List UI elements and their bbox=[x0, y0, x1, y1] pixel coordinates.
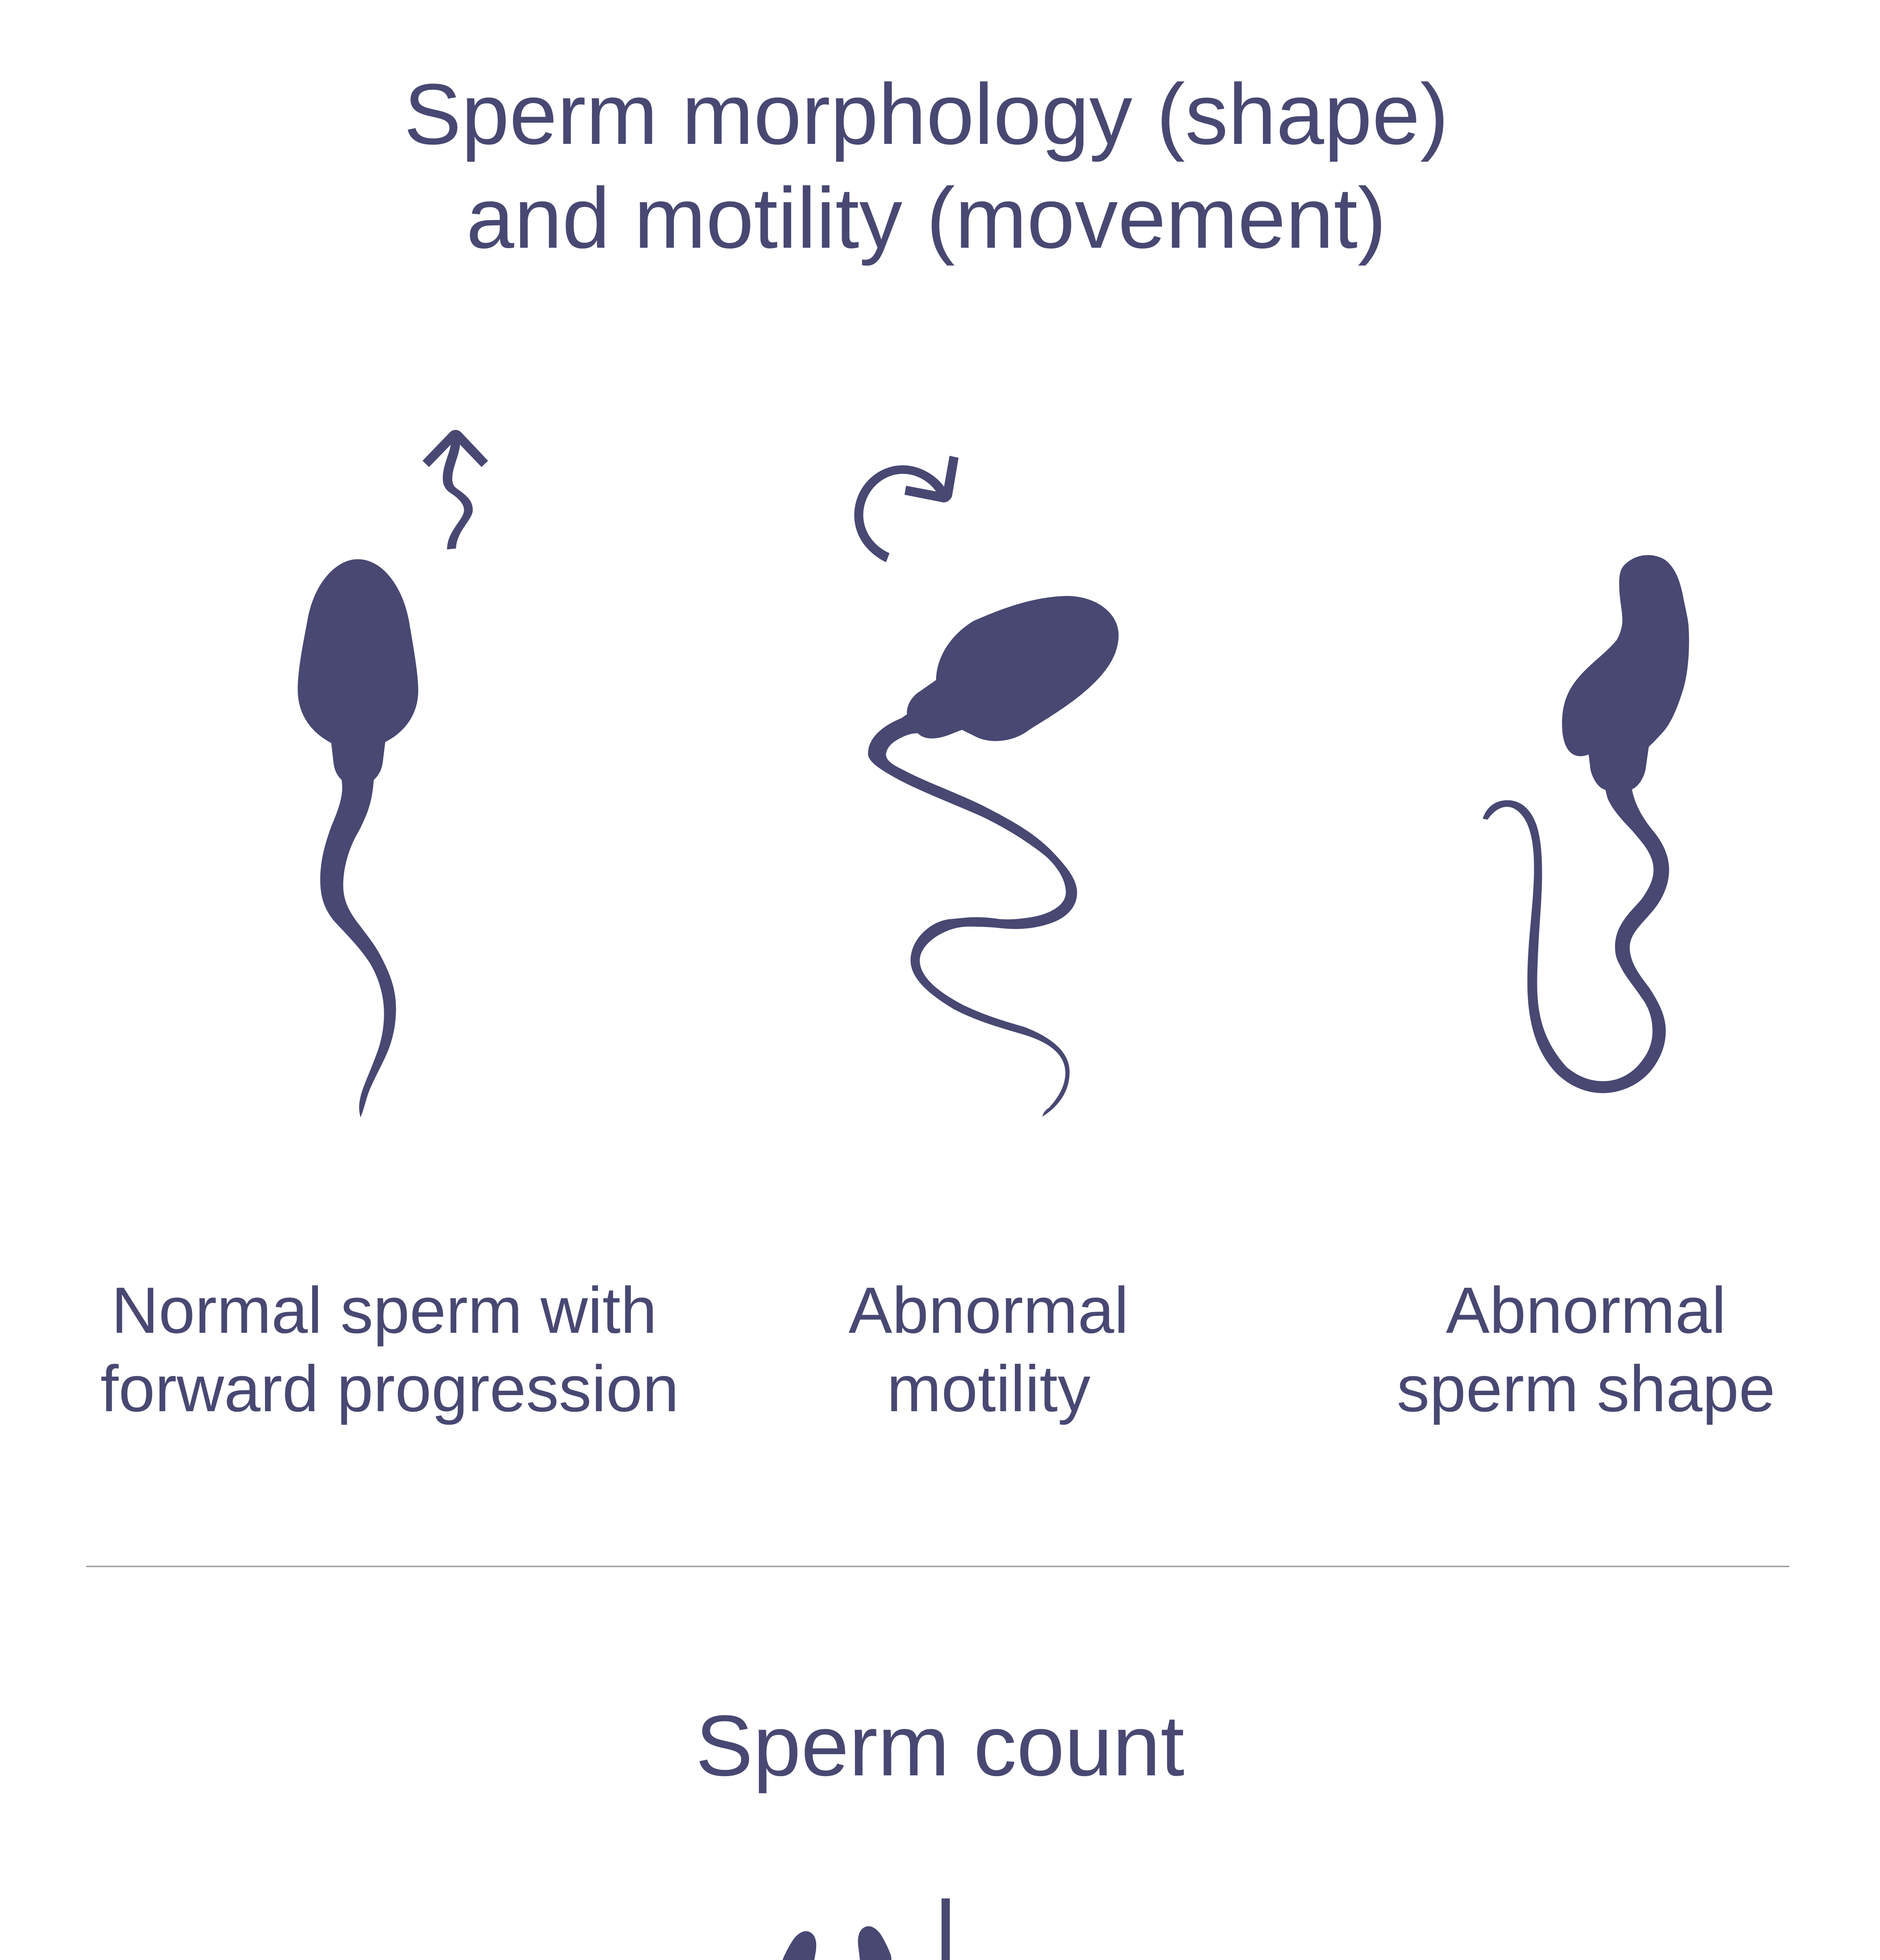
section: sperm morphology and motility bbox=[100, 66, 1775, 1425]
label: normal sperm with forward progression: forward progression bbox=[100, 1352, 679, 1425]
heading: sperm count: Sperm count bbox=[695, 1697, 1185, 1794]
label: abnormal motility: Abnormal bbox=[849, 1274, 1129, 1347]
sperm B bbox=[851, 1922, 922, 1960]
label: abnormal sperm shape: sperm shape bbox=[1397, 1352, 1775, 1425]
label: normal sperm with forward progression: Normal sperm with bbox=[111, 1274, 657, 1347]
label: abnormal sperm shape: Abnormal bbox=[1446, 1274, 1726, 1347]
icon: abnormal motility sperm bbox=[854, 456, 1119, 1117]
icon: abnormal sperm shape bbox=[1483, 555, 1689, 1093]
sperm body: normal bbox=[298, 559, 418, 1117]
title: sperm morphology and motility: Sperm morphology (shape) bbox=[404, 66, 1449, 162]
section: sperm count bbox=[501, 1697, 1375, 1960]
sperm A bbox=[747, 1927, 824, 1960]
label: abnormal motility: motility bbox=[887, 1352, 1091, 1425]
arrow: wavy forward arrow bbox=[423, 430, 488, 550]
cluster: normal sperm count bbox=[501, 1922, 923, 1960]
title: sperm morphology and motility: and motility (movement) bbox=[466, 170, 1386, 266]
icon: normal sperm with forward progression bbox=[298, 430, 488, 1117]
sperm body: abnormal motility bbox=[868, 596, 1119, 1117]
arrow: circular rotation arrow bbox=[854, 456, 958, 562]
divider bar between normal and low count bbox=[942, 1898, 950, 1960]
chart: sperm count comparison bbox=[501, 1898, 1311, 1960]
